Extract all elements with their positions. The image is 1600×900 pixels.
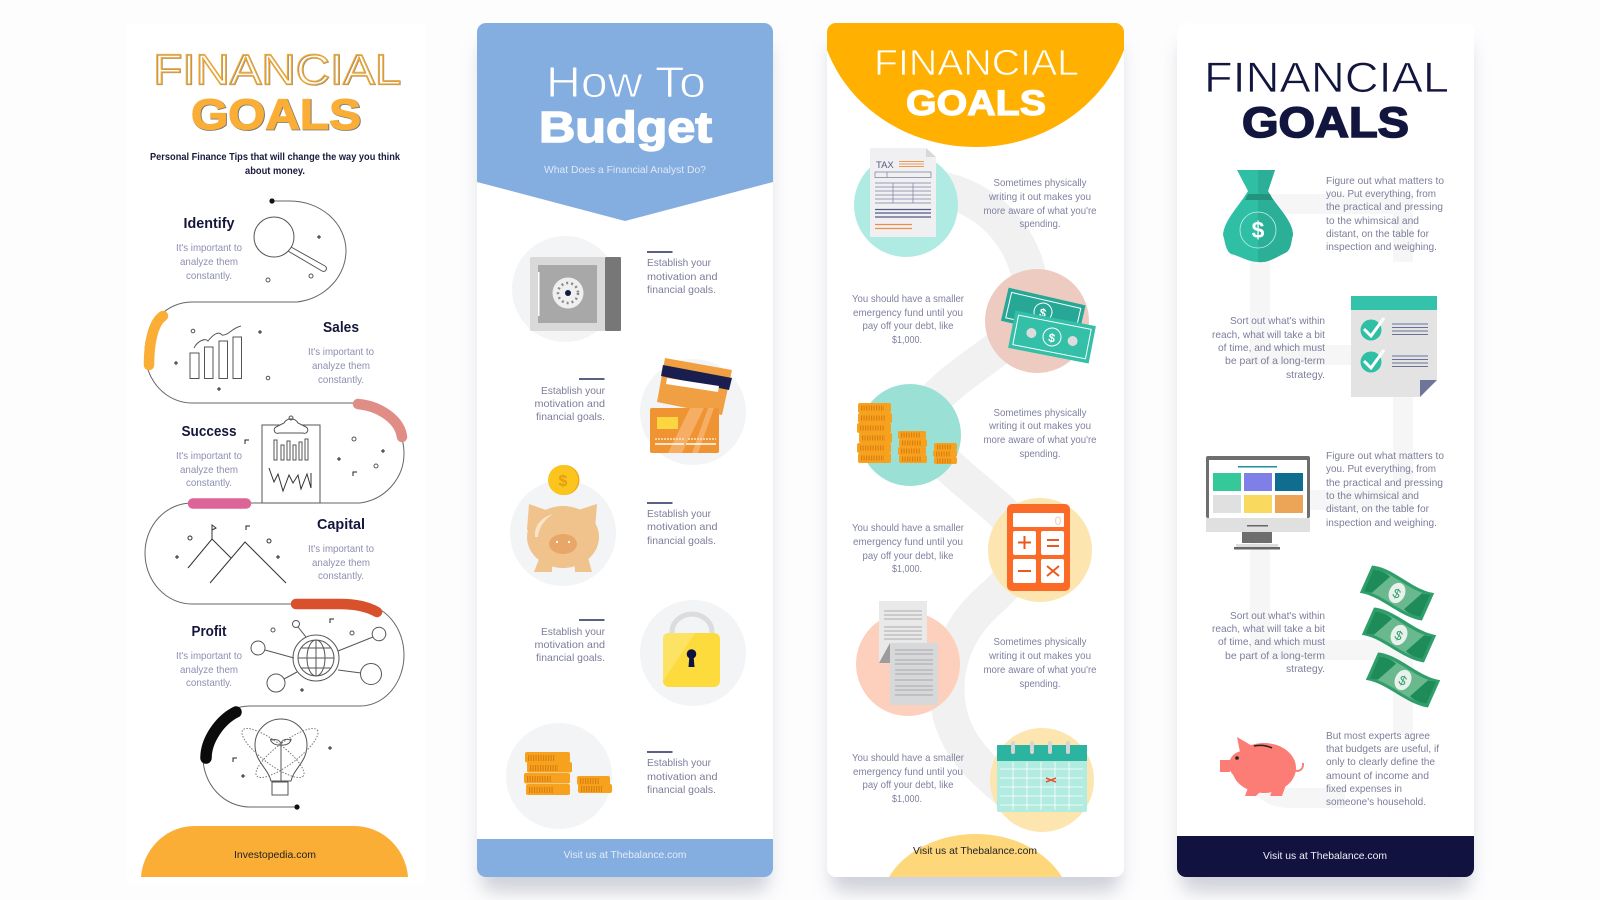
step: sales — [308, 319, 374, 386]
text: tip 6: $1,000. — [892, 793, 922, 805]
step: sales: It's important to — [308, 346, 374, 358]
title: financial goals white: FINANCIAL — [874, 42, 1079, 83]
text: block 4: of time, and which must — [1218, 636, 1325, 648]
text: tip 3: writing it out makes you — [988, 420, 1091, 432]
text: block 4: reach, what will take a bit — [1212, 623, 1325, 635]
text: tip 1 — [984, 177, 1097, 230]
icon: checklist — [1351, 296, 1437, 397]
text: tip 4: You should have a smaller — [852, 522, 964, 534]
step: profit: analyze them — [180, 664, 238, 676]
text: block 5: But most experts agree — [1326, 730, 1430, 742]
icon: piggy bank and coin — [510, 465, 616, 586]
text: tip 4: pay off your debt, like — [862, 550, 954, 562]
text: block 4: be part of a long-term — [1225, 650, 1325, 662]
icon: banknotes — [985, 269, 1096, 373]
text: block 1: to the whimsical and — [1326, 215, 1419, 227]
text: block 4 — [1212, 610, 1325, 675]
text: step 1: Establish your — [647, 257, 711, 269]
subtitle — [150, 151, 400, 177]
step: capital: analyze them — [312, 557, 370, 569]
title: financial goals outline: GOALS — [191, 91, 361, 139]
text: block 5: amount of income and — [1326, 770, 1429, 782]
text: block 1: distant, on the table for — [1326, 228, 1429, 240]
icon: tax form: TAX — [876, 160, 894, 171]
text: tip 6: emergency fund until you — [853, 766, 963, 778]
thick accent: red — [296, 604, 377, 612]
footer: navy: Visit us at Thebalance.com — [1263, 850, 1387, 862]
header: blue banner — [477, 23, 773, 221]
text: step 4: motivation and — [534, 639, 605, 651]
text: block 1: inspection and weighing. — [1326, 241, 1437, 253]
icon: banknotes: $ — [1047, 330, 1057, 346]
text: tip 1: more aware of what you're — [984, 205, 1097, 217]
text: step 2: financial goals. — [536, 411, 605, 423]
title: financial goals outline — [153, 46, 402, 140]
text: tip 3: Sometimes physically — [994, 407, 1087, 419]
text: tip 2 — [852, 293, 964, 346]
title: how to budget — [539, 58, 712, 152]
step: capital: constantly. — [318, 570, 364, 582]
icon: pink piggy bank — [1220, 737, 1303, 796]
step: identify: It's important to — [176, 242, 242, 254]
footer: yellow dome: Visit us at Thebalance.com — [913, 845, 1037, 857]
text: step 4: Establish your — [541, 626, 605, 638]
text: block 5: someone's household. — [1326, 796, 1426, 808]
text: tip 5: Sometimes physically — [994, 636, 1087, 648]
icon: mountains — [175, 525, 286, 583]
text: tip 1: writing it out makes you — [988, 191, 1091, 203]
panel: financial goals line-art — [127, 24, 425, 884]
text: tip 2: $1,000. — [892, 334, 922, 346]
title: financial goals outline: FINANCIAL — [153, 46, 401, 94]
icon: documents — [856, 601, 960, 716]
text: block 2: strategy. — [1286, 369, 1325, 381]
subtitle: about money. — [245, 165, 305, 177]
text: block 3: the practical and pressing — [1326, 477, 1443, 489]
text: block 5: fixed expenses in — [1326, 783, 1402, 795]
panel: financial goals navy — [1177, 23, 1474, 892]
text: block 1: you. Put everything, from — [1326, 188, 1436, 200]
icon: calendar — [990, 728, 1094, 832]
text: tip 2: You should have a smaller — [852, 293, 964, 305]
text: tip 6 — [852, 752, 964, 805]
step: identify: constantly. — [186, 270, 232, 282]
step: capital: Capital — [317, 516, 365, 533]
title: financial goals white: GOALS — [906, 84, 1046, 123]
text: tip 2: pay off your debt, like — [862, 320, 954, 332]
icon: lightbulb — [233, 719, 332, 795]
text: block 5: only to clearly define the — [1326, 756, 1435, 768]
panel: financial goals orange — [827, 23, 1124, 892]
footer: navy — [1177, 836, 1474, 877]
footer: visit us — [477, 839, 773, 877]
text: step 4: financial goals. — [536, 652, 605, 664]
icon: clipboard chart — [245, 416, 385, 503]
icon: money bag: $ — [1252, 217, 1265, 243]
text: step 3: motivation and — [647, 521, 718, 533]
icon: safe — [512, 236, 621, 342]
text: block 2 — [1212, 315, 1325, 381]
text: block 2: reach, what will take a bit — [1212, 329, 1325, 341]
text: block 2: of time, and which must — [1218, 342, 1325, 354]
step: profit: constantly. — [186, 677, 232, 689]
step: profit — [176, 623, 242, 689]
text: tip 6: pay off your debt, like — [862, 779, 954, 791]
thick accent: black — [206, 712, 236, 758]
step: identify — [176, 215, 242, 282]
text: step 5: Establish your — [647, 757, 711, 769]
text: step 5: financial goals. — [647, 784, 716, 796]
icon: magnifier — [254, 217, 326, 282]
title: financial goals navy: GOALS — [1242, 99, 1409, 147]
header: orange dome — [827, 23, 1124, 147]
text: tip 3: more aware of what you're — [984, 434, 1097, 446]
text: block 3: you. Put everything, from — [1326, 463, 1436, 475]
footer: investopedia — [141, 826, 408, 877]
title: financial goals outline: FINANCIAL — [154, 47, 402, 95]
step: identify: analyze them — [180, 256, 238, 268]
text: block 1 — [1326, 175, 1444, 253]
text: tip 5 — [984, 636, 1097, 690]
text: step 3: financial goals. — [647, 535, 716, 547]
title: how to budget: Budget — [539, 103, 712, 152]
text: tip 3: spending. — [1020, 448, 1060, 460]
footer: investopedia: Investopedia.com — [234, 849, 316, 861]
icon: piggy bank and coin: $ — [559, 473, 568, 490]
icon: coins — [506, 723, 612, 829]
icon: globe network — [251, 619, 386, 692]
icon: bar chart — [174, 326, 270, 391]
text: tip 3 — [984, 407, 1097, 460]
icon: flying bills — [1359, 564, 1441, 709]
icon: banknotes: $ — [1038, 305, 1048, 321]
text: step 3: Establish your — [647, 508, 711, 520]
thick accent: salmon — [358, 404, 402, 437]
text: tip 4: $1,000. — [892, 563, 922, 575]
icon: credit cards — [640, 358, 746, 465]
step: success: analyze them — [180, 464, 238, 476]
panel: how to budget — [477, 23, 773, 892]
title: how to budget: How To — [546, 58, 706, 107]
text: step 2 — [534, 378, 605, 423]
grey connector steps — [1260, 204, 1403, 798]
text: block 4: Sort out what's within — [1230, 610, 1325, 622]
step: capital: It's important to — [308, 543, 374, 555]
thick accent: orange — [149, 316, 163, 365]
title: financial goals outline: GOALS — [192, 92, 362, 140]
text: block 3: Figure out what matters to — [1326, 450, 1444, 462]
title: financial goals navy — [1204, 54, 1449, 147]
footer: yellow dome — [889, 834, 1062, 877]
text: step 4 — [534, 619, 605, 664]
icon: calculator — [988, 498, 1092, 602]
text: block 3: inspection and weighing. — [1326, 517, 1437, 529]
step: success: constantly. — [186, 477, 232, 489]
text: step 1: financial goals. — [647, 284, 716, 296]
subtitle: What Does a Financial Analyst Do? — [544, 164, 706, 176]
step: capital — [308, 516, 374, 582]
icon: money bag — [1223, 170, 1293, 262]
icon: flying bills: $ — [1392, 627, 1406, 644]
text: tip 4: emergency fund until you — [853, 536, 963, 548]
text: step 2: Establish your — [541, 385, 605, 397]
text: step 5: motivation and — [647, 771, 718, 783]
icon: flying bills: $ — [1390, 585, 1404, 602]
text: step 2: motivation and — [534, 398, 605, 410]
winding grey road — [923, 187, 1032, 800]
text: tip 6: You should have a smaller — [852, 752, 964, 764]
text: step 3 — [647, 502, 718, 547]
step: profit: Profit — [192, 623, 226, 640]
text: block 3 — [1326, 450, 1444, 529]
text: block 3: to the whimsical and — [1326, 490, 1419, 502]
text: step 1: motivation and — [647, 271, 718, 283]
text: block 1: the practical and pressing — [1326, 201, 1443, 213]
text: tip 5: spending. — [1020, 678, 1060, 690]
step: identify: Identify — [184, 215, 235, 232]
text: tip 2: emergency fund until you — [853, 307, 963, 319]
text: block 1: Figure out what matters to — [1326, 175, 1444, 187]
text: tip 1: spending. — [1020, 218, 1060, 230]
text: block 2: Sort out what's within — [1230, 315, 1325, 327]
text: step 1 — [647, 251, 718, 296]
icon: coin stacks — [857, 384, 961, 486]
icon: calculator: 0 — [1055, 514, 1062, 528]
text: block 3: distant, on the table for — [1326, 503, 1429, 515]
winding line path — [145, 198, 404, 810]
subtitle: Personal Finance Tips that will change the way you think — [150, 151, 400, 163]
text: tip 4 — [852, 522, 964, 575]
icon: monitor — [1206, 456, 1310, 550]
title: financial goals navy: FINANCIAL — [1204, 54, 1449, 102]
icon: tax form — [854, 148, 958, 257]
text: tip 5: writing it out makes you — [988, 650, 1091, 662]
step: sales: Sales — [323, 319, 359, 336]
text: tip 1: Sometimes physically — [994, 177, 1087, 189]
text: step 5 — [647, 751, 718, 796]
step: sales: analyze them — [312, 360, 370, 372]
step: success: It's important to — [176, 450, 242, 462]
icon: flying bills: $ — [1396, 672, 1410, 689]
text: block 2: be part of a long-term — [1225, 355, 1325, 367]
step: success — [176, 423, 242, 489]
text: tip 5: more aware of what you're — [984, 664, 1097, 676]
step: sales: constantly. — [318, 374, 364, 386]
footer: visit us: Visit us at Thebalance.com — [564, 849, 687, 861]
text: block 5 — [1326, 730, 1439, 808]
step: success: Success — [182, 423, 236, 440]
thick accent: magenta — [193, 498, 246, 509]
text: block 4: strategy. — [1286, 663, 1325, 675]
text: block 5: that budgets are useful, if — [1326, 743, 1439, 755]
step: profit: It's important to — [176, 650, 242, 662]
icon: padlock — [640, 600, 746, 706]
title: financial goals white — [874, 42, 1079, 123]
